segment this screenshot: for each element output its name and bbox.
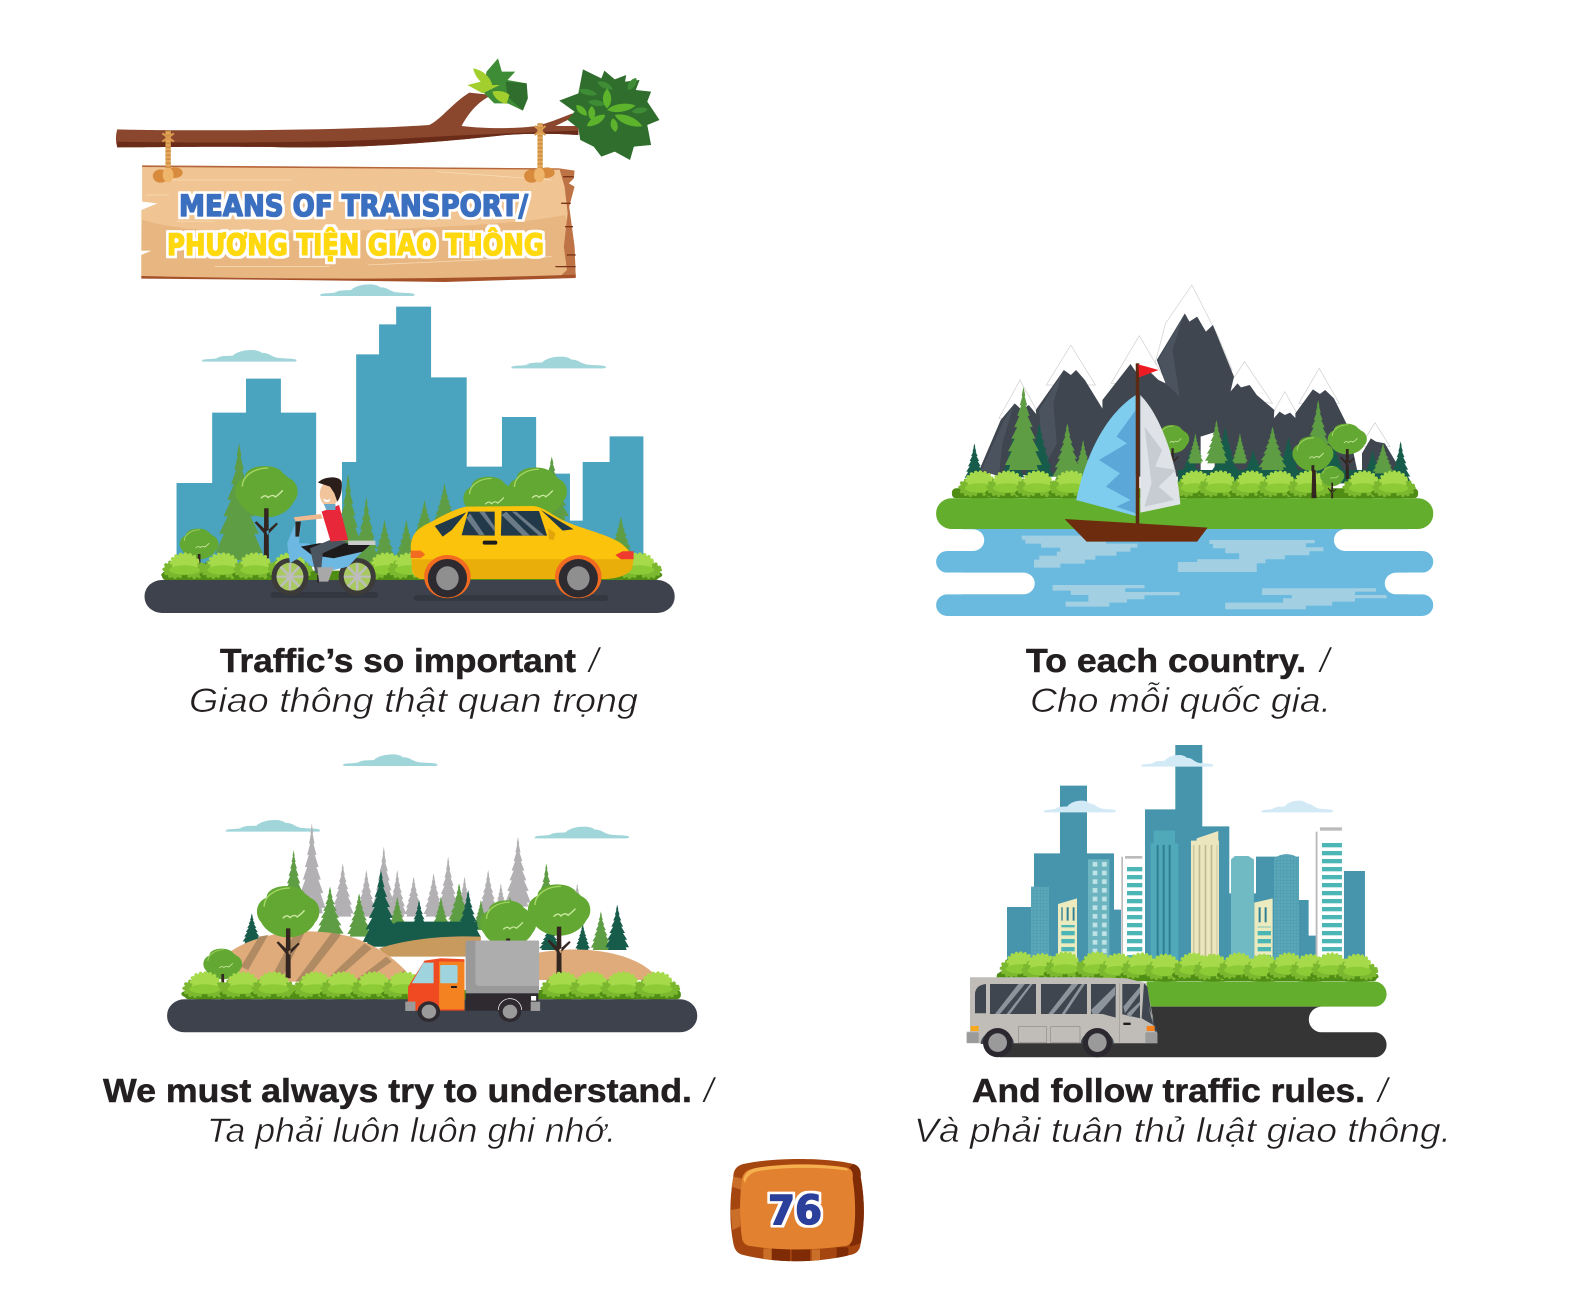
green firs: [284, 850, 611, 950]
mountain light facets: [981, 317, 1183, 477]
caption: bottom left: [103, 1072, 717, 1150]
board grain: [146, 172, 552, 267]
caption: bottom right: Và phải tuân thủ luật giao thông.: [914, 1112, 1451, 1150]
round trees: [180, 466, 567, 584]
title text: PHƯƠNG TIỆN GIAO THÔNG: [167, 228, 544, 262]
road: [145, 580, 675, 613]
road: [167, 999, 697, 1032]
title text: [167, 189, 544, 262]
bus: [967, 977, 1157, 1057]
left rope: [153, 131, 183, 183]
water: [920, 527, 1455, 616]
motorbike and rider: [271, 477, 376, 595]
caption: top left: Traffic’s so important: [220, 642, 576, 679]
clouds: [1044, 755, 1333, 812]
grass bank: [936, 498, 1433, 529]
caption: top left: [189, 642, 638, 720]
road shadows: [271, 592, 608, 601]
caption: bottom right: /: [1376, 1072, 1391, 1110]
caption: top left: /: [587, 642, 602, 680]
title text: MEANS OF TRANSPORT/: [179, 189, 528, 223]
towers: [1031, 827, 1343, 967]
clouds: [226, 754, 629, 838]
background skyline: [1007, 745, 1365, 968]
caption: top right: Cho mỗi quốc gia.: [1030, 682, 1331, 720]
green firs: [1005, 387, 1394, 480]
car: [411, 506, 634, 598]
caption: bottom right: And follow traffic rules.: [972, 1072, 1365, 1109]
round trees: [1156, 424, 1367, 499]
caption: top left: Giao thông thật quan trọng: [189, 682, 638, 720]
snow peaks: [999, 285, 1390, 447]
hills: [228, 931, 659, 982]
branch: [116, 93, 578, 147]
bushes: [181, 973, 681, 1000]
skyline: [177, 307, 643, 567]
water reflections: [1022, 536, 1387, 609]
road: [1000, 1007, 1387, 1057]
scene: city with motorbike and car: [145, 284, 675, 613]
small leaves: [467, 58, 528, 111]
dark firs: [243, 870, 629, 950]
scene: downtown with bus: [967, 745, 1387, 1057]
scene: lake with sailboat and mountains: [920, 285, 1455, 616]
truck: [405, 941, 540, 1022]
caption: top right: [1026, 642, 1333, 720]
page number: 76: [768, 1188, 822, 1234]
board edge cracks: [555, 177, 576, 267]
grey firs: [298, 823, 585, 917]
board top edge: [142, 165, 559, 170]
branch underside shade: [117, 131, 578, 147]
caption: top right: To each country.: [1026, 642, 1306, 679]
dark firs: [965, 423, 1412, 487]
page number badge: [730, 1159, 864, 1263]
title sign on branch: [116, 58, 660, 282]
scene: countryside with truck: [167, 754, 697, 1032]
fir trees: [215, 443, 633, 567]
board lower band: [141, 215, 576, 281]
caption: bottom right: [914, 1072, 1451, 1150]
caption: bottom left: Ta phải luôn luôn ghi nhớ.: [207, 1112, 616, 1150]
caption: bottom left: We must always try to understand.: [103, 1072, 692, 1109]
wood board: [141, 165, 576, 281]
round trees: [203, 884, 590, 1004]
large leaves: [559, 69, 660, 160]
board right edge: [559, 168, 576, 277]
right rope: [524, 123, 555, 183]
bushes: [161, 554, 662, 581]
mountains: [978, 313, 1401, 477]
clouds: [202, 284, 606, 368]
board bottom edge: [141, 275, 576, 282]
caption: bottom left: /: [702, 1072, 717, 1110]
sailboat: [1065, 363, 1208, 542]
bushes: [997, 953, 1379, 982]
bushes: [952, 466, 1418, 503]
caption: top right: /: [1318, 642, 1333, 680]
grass strip: [1147, 982, 1387, 1007]
